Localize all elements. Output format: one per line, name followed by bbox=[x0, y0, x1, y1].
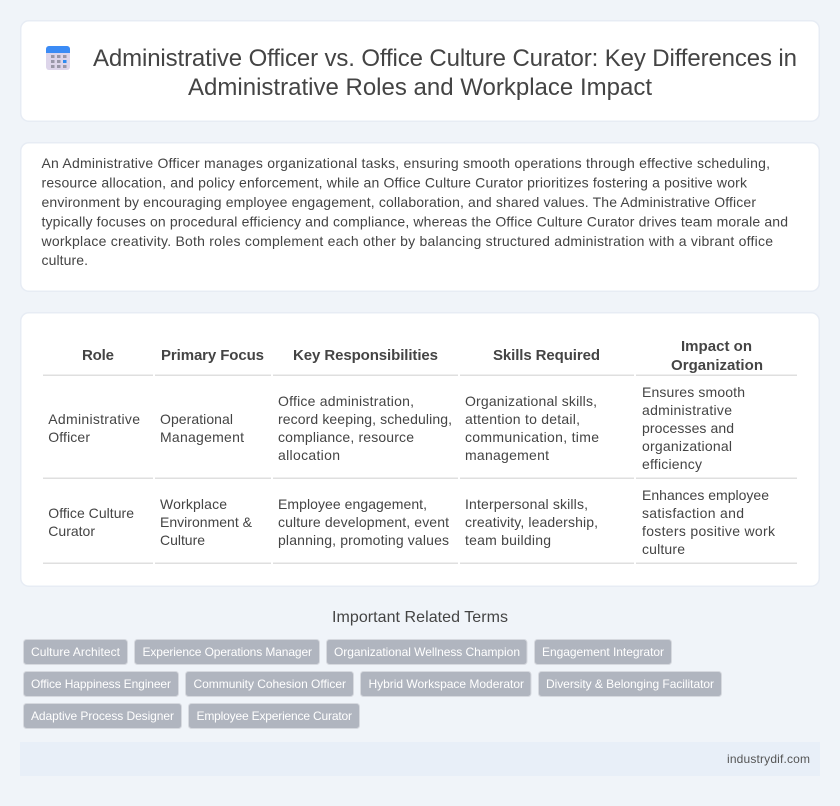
panel: summary paragraph: workplace creativity. Both roles complement each other by balancing structured administration with a vibrant office bbox=[40, 233, 773, 249]
panel: summary paragraph: culture. bbox=[42, 252, 88, 268]
table row: Administrative Officer: administrative bbox=[642, 402, 732, 418]
panel: comparison table bbox=[21, 313, 819, 586]
table row: Administrative Officer: allocation bbox=[278, 447, 340, 463]
table row: Administrative Officer: Management bbox=[160, 429, 244, 445]
table header row: Skills Required bbox=[493, 347, 600, 364]
table header row: Key Responsibilities bbox=[293, 347, 438, 364]
footer bar bbox=[20, 742, 820, 776]
table header row bbox=[82, 338, 763, 374]
table row: Administrative Officer: Ensures smooth bbox=[642, 384, 745, 400]
panel: summary paragraph: typically focuses on procedural efficiency and compliance, whereas the Office Culture Curator drives team morale and bbox=[42, 214, 788, 230]
table row: Office Culture Curator: team building bbox=[465, 532, 551, 548]
table row: Administrative Officer: organizational bbox=[642, 438, 732, 454]
table header row: Role bbox=[82, 347, 114, 364]
table row: Administrative Officer: record keeping, scheduling, bbox=[278, 411, 452, 427]
related term tags: Adaptive Process Designer bbox=[31, 709, 174, 723]
table row: Administrative Officer: communication, time bbox=[465, 429, 599, 445]
table header row: Organization bbox=[671, 357, 763, 374]
table row: Administrative Officer: Officer bbox=[48, 429, 90, 445]
related term tags: Culture Architect bbox=[31, 645, 121, 659]
footer bar: industrydif.com bbox=[727, 752, 810, 766]
table row: Office Culture Curator: Workplace bbox=[160, 496, 227, 512]
panel: summary paragraph: resource allocation, and policy enforcement, while an Office Culture Curator prioritizes fostering a positive work bbox=[42, 174, 748, 190]
title: Administrative Officer vs. Office Culture Curator: Key Differences in bbox=[93, 45, 797, 72]
panel: summary paragraph bbox=[21, 143, 819, 291]
table row: Office Culture Curator: Culture bbox=[160, 532, 205, 548]
related term tags: Hybrid Workspace Moderator bbox=[368, 677, 524, 691]
table row: Administrative Officer: processes and bbox=[642, 420, 734, 436]
table row: Administrative Officer: Organizational skills, bbox=[465, 393, 597, 409]
table row: Office Culture Curator: Environment & bbox=[160, 514, 253, 530]
related term tags: Diversity & Belonging Facilitator bbox=[546, 677, 714, 691]
table row: Office Culture Curator: satisfaction and bbox=[642, 505, 744, 521]
related term tags: Experience Operations Manager bbox=[142, 645, 312, 659]
title bbox=[93, 45, 797, 101]
title: Administrative Roles and Workplace Impact bbox=[188, 74, 652, 101]
panel: summary paragraph: environment by encouraging employee engagement, collaboration, and shared values. The Administrative Officer bbox=[42, 194, 756, 210]
related term tags: Office Happiness Engineer bbox=[31, 677, 171, 691]
related term tags: Community Cohesion Officer bbox=[194, 677, 346, 691]
table header row: Impact on bbox=[681, 338, 752, 355]
heading: important related terms: Important Related Terms bbox=[332, 609, 508, 626]
table row: Office Culture Curator: Employee engagement, bbox=[278, 496, 427, 512]
table row: Office Culture Curator: Interpersonal skills, bbox=[465, 496, 588, 512]
table row: Administrative Officer: Administrative bbox=[48, 411, 140, 427]
related term tags: Employee Experience Curator bbox=[196, 709, 352, 723]
table row: Administrative Officer: Operational bbox=[160, 411, 233, 427]
related term tags: Organizational Wellness Champion bbox=[334, 645, 520, 659]
related term tags: Engagement Integrator bbox=[542, 645, 664, 659]
table row: Office Culture Curator: Office Culture bbox=[48, 505, 134, 521]
table row: Office Culture Curator: creativity, leadership, bbox=[465, 514, 598, 530]
icon: calendar bbox=[46, 46, 70, 70]
panel: title header bbox=[21, 21, 819, 121]
related term tags bbox=[24, 640, 722, 728]
table row: Office Culture Curator bbox=[48, 487, 776, 557]
table row: Office Culture Curator: fosters positive work bbox=[642, 523, 776, 539]
table row: Office Culture Curator: Enhances employee bbox=[642, 487, 769, 503]
table row: Administrative Officer bbox=[48, 384, 745, 472]
panel: summary paragraph: An Administrative Officer manages organizational tasks, ensuring smooth operations through effective scheduling, bbox=[42, 155, 770, 171]
table row: Administrative Officer: compliance, resource bbox=[278, 429, 414, 445]
table row: Administrative Officer: efficiency bbox=[642, 456, 702, 472]
table row: Administrative Officer: Office administration, bbox=[278, 393, 414, 409]
table row: Administrative Officer: management bbox=[465, 447, 549, 463]
table row: Office Culture Curator: culture bbox=[642, 541, 685, 557]
table header row: Primary Focus bbox=[161, 347, 264, 364]
table row: Administrative Officer: attention to detail, bbox=[465, 411, 580, 427]
table row: Office Culture Curator: planning, promoting values bbox=[278, 532, 449, 548]
table row: Office Culture Curator: Curator bbox=[48, 523, 95, 539]
table row: Office Culture Curator: culture development, event bbox=[278, 514, 449, 530]
